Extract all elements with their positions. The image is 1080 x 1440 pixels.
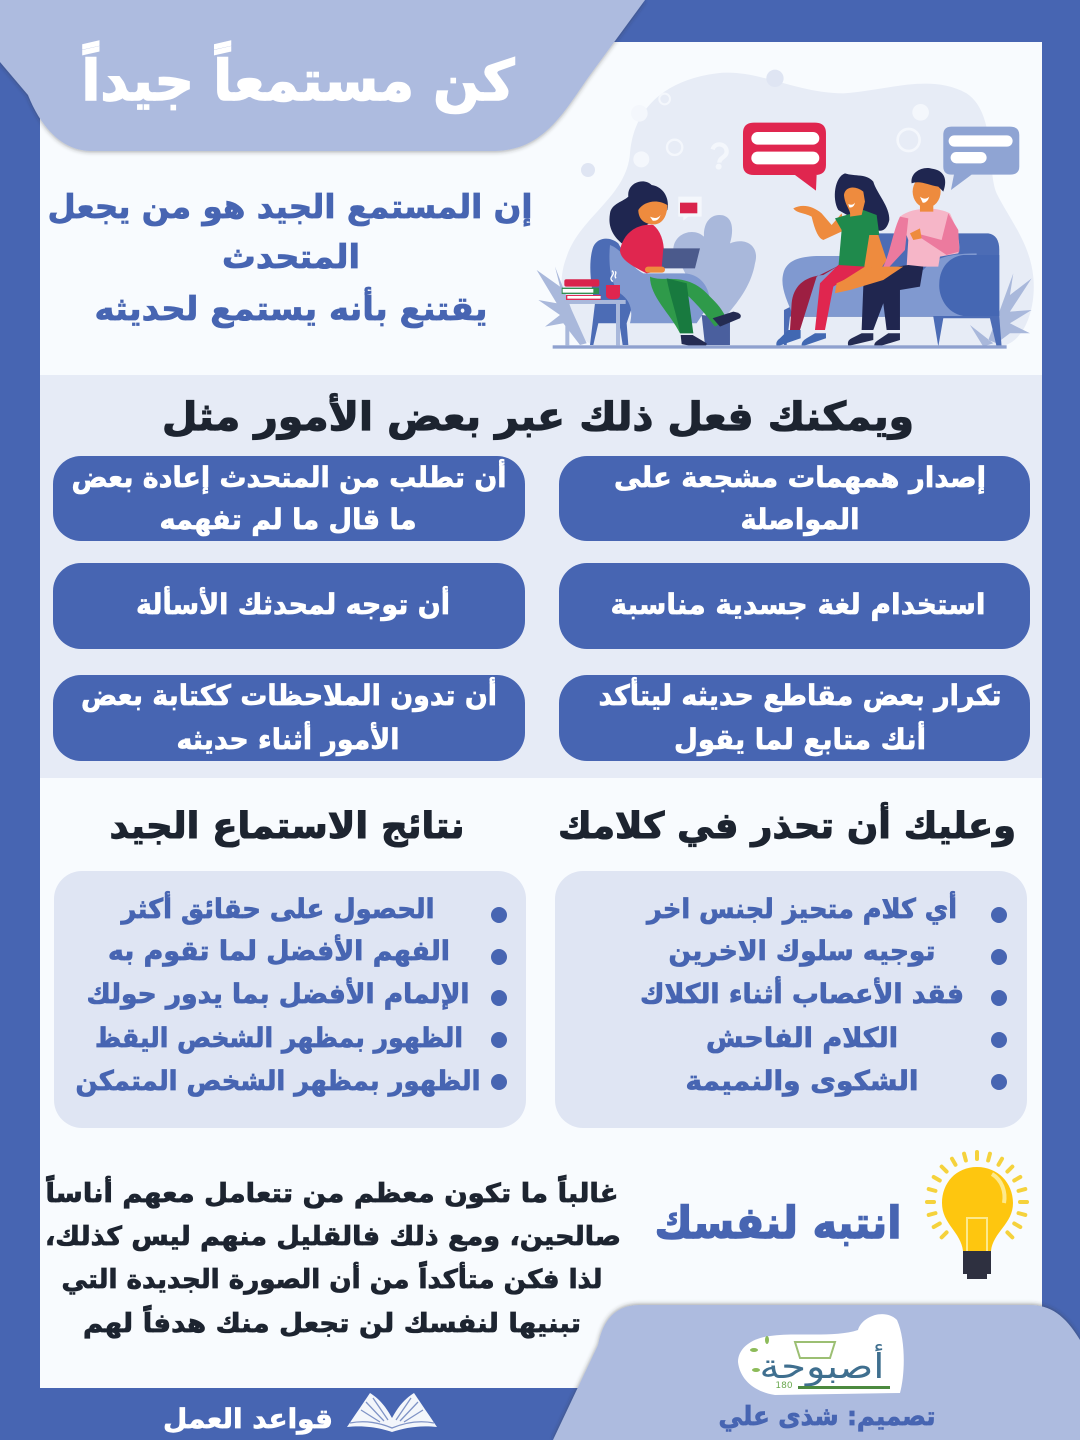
logo: أصبوحة <box>760 1344 884 1387</box>
heading: be careful in your speech: وعليك أن تحذر في كلامك <box>558 802 1016 847</box>
panel: results list: الظهور بمظهر الشخص اليقظ <box>95 1023 463 1054</box>
tip pill: ask questions: أن توجه لمحدثك الأسألة <box>136 586 450 621</box>
logo: 180 <box>775 1381 793 1391</box>
panel: results list <box>54 871 526 1128</box>
tip pill: take notes: الأمور أثناء حديثه <box>176 721 400 756</box>
tip pill: take notes: أن تدون الملاحظات ككتابة بعض <box>81 677 497 712</box>
talking woman <box>776 173 889 347</box>
intro text <box>48 187 532 329</box>
panel: things to avoid list <box>555 871 1027 1128</box>
icon: blue speech bubble <box>943 127 1019 190</box>
paragraph: closing advice: غالباً ما تكون معظم من تتعامل معهم أناساً <box>45 1174 618 1209</box>
panel: results list: الإلمام الأفضل بما يدور حولك <box>86 977 470 1010</box>
intro text: المتحدث <box>222 237 360 276</box>
paragraph: closing advice: صالحين، ومع ذلك فالقليل منهم ليس كذلك، <box>45 1222 621 1252</box>
section heading: tips: ويمكنك فعل ذلك عبر بعض الأمور مثل <box>162 392 914 440</box>
panel: things to avoid list: الكلام الفاحش <box>706 1023 898 1054</box>
plants <box>537 215 1032 347</box>
paragraph: closing advice <box>45 1174 621 1339</box>
icon: light bulb <box>927 1152 1027 1279</box>
footer label: work rules: قواعد العمل <box>163 1404 333 1435</box>
icon: red speech bubble <box>743 123 826 191</box>
tip pill: repeat passages <box>559 675 1030 761</box>
panel: things to avoid list: أي كلام متحيز لجنس اخر <box>645 891 957 925</box>
intro text: يقتنع بأنه يستمع لحديثه <box>94 287 488 329</box>
panel: results list: الحصول على حقائق أكثر <box>120 891 434 925</box>
tip pill: body language: استخدام لغة جسدية مناسبة <box>610 588 986 621</box>
logo <box>738 1314 904 1395</box>
designer credit: تصميم: شذى علي <box>718 1402 936 1432</box>
man in pink <box>835 168 959 348</box>
panel: results list: الظهور بمظهر الشخص المتمكن <box>76 1066 480 1097</box>
heading: results of good listening: نتائج الاستماع الجيد <box>110 806 464 847</box>
paragraph: closing advice: لذا فكن متأكداً من أن الصورة الجديدة التي <box>62 1260 602 1295</box>
pot <box>702 315 730 345</box>
paragraph: closing advice: تبنيها لنفسك لن تجعل منك هدفاً لهم <box>83 1304 581 1339</box>
icon: open book <box>347 1393 437 1432</box>
side table with books and cup <box>562 271 626 345</box>
tip pill: ask speaker to repeat: ما قال ما لم تفهمه <box>160 503 416 536</box>
tip pill: ask speaker to repeat: أن تطلب من المتحدث إعادة بعض <box>72 459 506 495</box>
tip pill: ask speaker to repeat <box>53 456 525 541</box>
intro text: إن المستمع الجيد هو من يجعل <box>48 187 532 227</box>
tip pill: encouraging sounds: المواصلة <box>740 503 860 536</box>
right sofa <box>782 233 1002 347</box>
tip pill: ask questions <box>53 563 525 649</box>
tip pill: encouraging sounds: إصدار همهمات مشجعة على <box>614 461 986 495</box>
illustration: three people talking on sofas <box>537 70 1034 349</box>
panel: things to avoid list: توجيه سلوك الاخرين <box>668 936 936 967</box>
tip pill: encouraging sounds <box>559 456 1030 541</box>
tip pill: body language <box>559 563 1030 649</box>
panel: things to avoid list: الشكوى والنميمة <box>686 1066 918 1097</box>
tip pill: repeat passages: أنك متابع لما يقول <box>674 721 926 756</box>
panel: results list: الفهم الأفضل لما تقوم به <box>108 934 450 967</box>
seated woman with laptop <box>609 181 741 348</box>
floor <box>553 345 1007 349</box>
tip pill: repeat passages: تكرار بعض مقاطع حديثه ليتأكد <box>598 677 1002 712</box>
panel: things to avoid list: فقد الأعصاب أثناء الكلاك <box>640 976 964 1010</box>
left armchair <box>590 239 710 345</box>
title: كن مستمعاً جيداً <box>82 41 515 114</box>
tinted band: tips section <box>40 375 1042 778</box>
heading: watch yourself: انتبه لنفسك <box>654 1198 902 1249</box>
title banner <box>0 0 645 151</box>
footer corner panel <box>553 1305 1080 1440</box>
tip pill: take notes <box>53 675 525 761</box>
